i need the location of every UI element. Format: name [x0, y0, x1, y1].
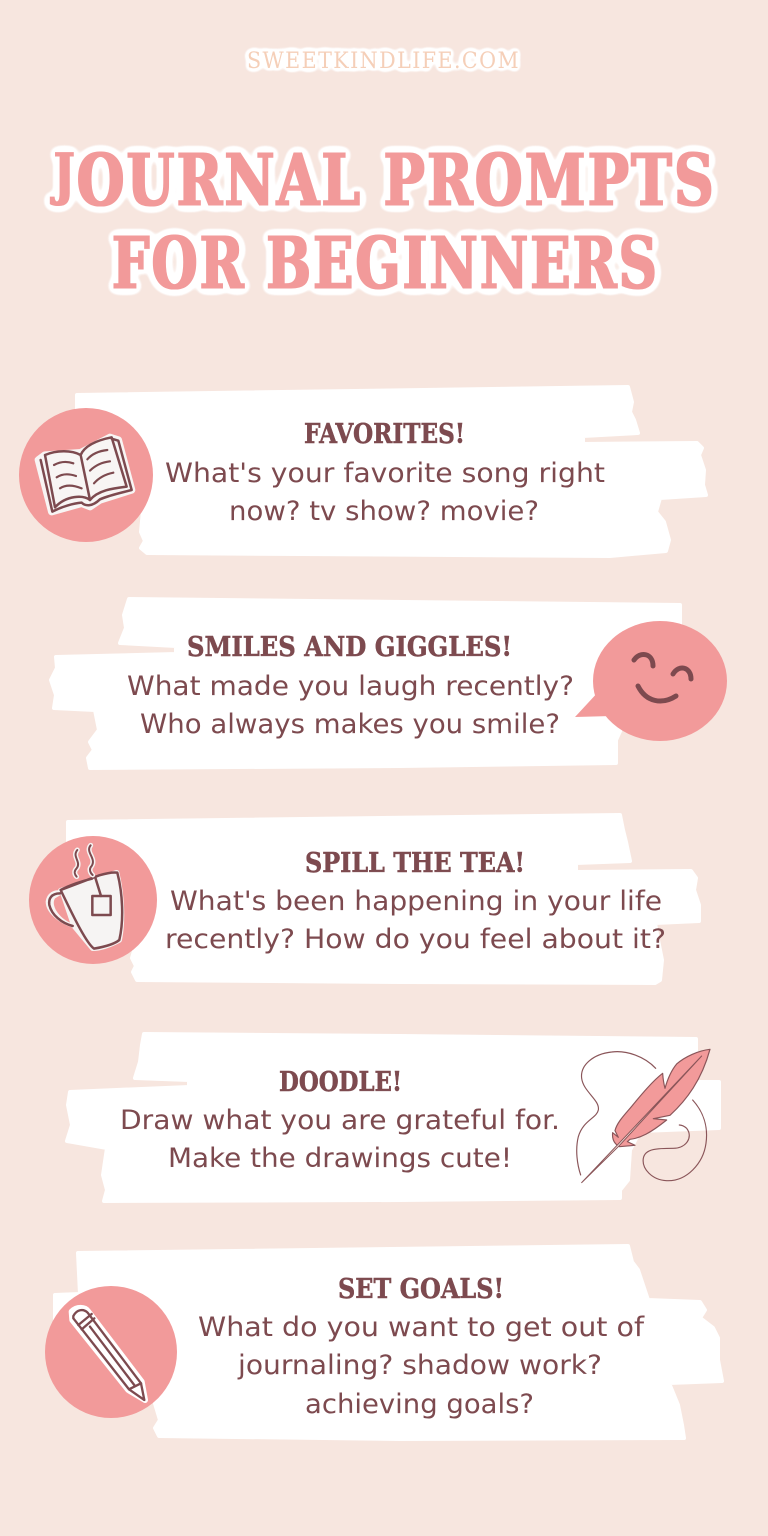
brush background	[77, 387, 706, 556]
prompt text	[165, 458, 605, 527]
prompt text	[127, 671, 574, 740]
brush background	[55, 1246, 722, 1439]
prompt text: What's your favorite song right	[165, 458, 605, 489]
brush background	[51, 599, 680, 768]
heading: SET GOALS!	[338, 1274, 504, 1305]
prompt text: achieving goals?	[305, 1389, 534, 1420]
panel: smiles and giggles	[51, 599, 727, 768]
website label: SWEETKINDLIFE.COM	[247, 49, 520, 74]
icon: pencil	[45, 1286, 177, 1418]
icon: open book	[19, 408, 153, 542]
panel: doodle	[67, 1034, 719, 1201]
brush background	[68, 815, 699, 983]
panel: set goals	[45, 1246, 722, 1439]
prompt text: Who always makes you smile?	[140, 709, 560, 740]
heading: DOODLE!	[279, 1067, 402, 1098]
icon: smiling speech bubble	[575, 621, 727, 741]
title	[50, 138, 716, 305]
icon: feather with swirl	[577, 1049, 710, 1183]
panel: favorites	[19, 387, 706, 556]
heading: SMILES AND GIGGLES!	[187, 632, 512, 663]
panel: spill the tea	[29, 815, 699, 983]
prompt text: What do you want to get out of	[198, 1312, 646, 1343]
title: J	[50, 142, 77, 208]
icon: tea mug	[29, 836, 157, 964]
heading: FAVORITES!	[304, 419, 465, 450]
brush background	[67, 1034, 719, 1201]
prompt text: What made you laugh recently?	[127, 671, 574, 702]
prompt text	[198, 1312, 646, 1420]
heading: SPILL THE TEA!	[305, 848, 525, 879]
prompt text	[120, 1105, 560, 1174]
prompt text	[165, 886, 666, 955]
prompt text: Make the drawings cute!	[168, 1143, 512, 1174]
prompt text: What's been happening in your life	[170, 886, 662, 917]
prompt text: recently? How do you feel about it?	[165, 924, 666, 955]
prompt text: now? tv show? movie?	[229, 496, 539, 527]
prompt text: journaling? shadow work?	[237, 1350, 602, 1381]
prompt text: Draw what you are grateful for.	[120, 1105, 560, 1136]
